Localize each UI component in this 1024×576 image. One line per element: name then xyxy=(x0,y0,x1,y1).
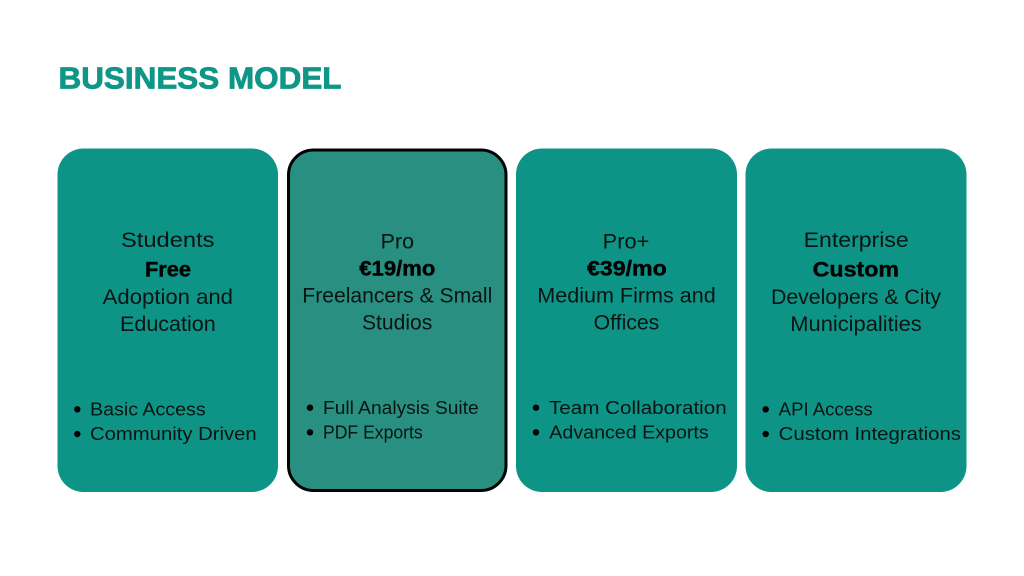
price: Free: Free xyxy=(145,259,191,282)
title: BUSINESS MODEL xyxy=(58,62,342,96)
audience: Developers & City Municipalities: Municipalities xyxy=(790,313,922,336)
audience: Developers & City Municipalities: Developers & City xyxy=(771,286,942,309)
audience: Developers & City Municipalities xyxy=(771,286,942,336)
audience: Freelancers & Small Studios xyxy=(302,285,492,334)
panel: Enterprise plan xyxy=(746,148,966,492)
plan name: Students: Students xyxy=(121,229,214,252)
panel: Pro+ plan xyxy=(516,148,737,492)
audience: Adoption and Education xyxy=(103,286,233,336)
price: €19/mo: €19/mo xyxy=(359,257,435,280)
price: Custom: Custom xyxy=(813,259,899,282)
audience: Freelancers & Small Studios: Studios xyxy=(362,311,432,334)
feature list: Pro: PDF Exports xyxy=(323,423,423,443)
audience: Adoption and Education: Adoption and xyxy=(103,286,233,309)
audience: Adoption and Education: Education xyxy=(120,313,216,336)
feature list: Pro+: Advanced Exports xyxy=(549,423,709,443)
feature list: Students: Community Driven xyxy=(90,424,257,444)
feature list: Pro+ xyxy=(533,398,727,443)
panel: Pro plan (highlighted) xyxy=(288,150,506,490)
feature list: Enterprise xyxy=(762,400,961,444)
audience: Medium Firms and Offices xyxy=(537,285,716,334)
price: €39/mo: €39/mo xyxy=(587,257,667,280)
feature list: Pro: Full Analysis Suite xyxy=(323,398,479,418)
plan name: Pro: Pro xyxy=(381,230,414,253)
panel: Students plan xyxy=(58,148,278,492)
feature list: Enterprise: Custom Integrations xyxy=(779,424,961,444)
feature list: Students: Basic Access xyxy=(90,400,206,420)
plan name: Enterprise: Enterprise xyxy=(804,229,909,252)
audience: Medium Firms and Offices: Offices xyxy=(594,311,659,334)
feature list: Enterprise: API Access xyxy=(779,400,873,420)
audience: Medium Firms and Offices: Medium Firms and xyxy=(537,285,716,308)
plan name: Pro+: Pro+ xyxy=(603,230,649,253)
card background: Pro+ xyxy=(516,148,737,492)
card background: Enterprise xyxy=(746,148,966,492)
card background: Students xyxy=(58,148,278,492)
feature list: Pro+: Team Collaboration xyxy=(549,398,727,418)
audience: Freelancers & Small Studios: Freelancers & Small xyxy=(302,285,492,308)
feature list: Students xyxy=(74,400,257,444)
card background: Pro with black outline xyxy=(288,150,506,490)
feature list: Pro xyxy=(307,398,479,443)
